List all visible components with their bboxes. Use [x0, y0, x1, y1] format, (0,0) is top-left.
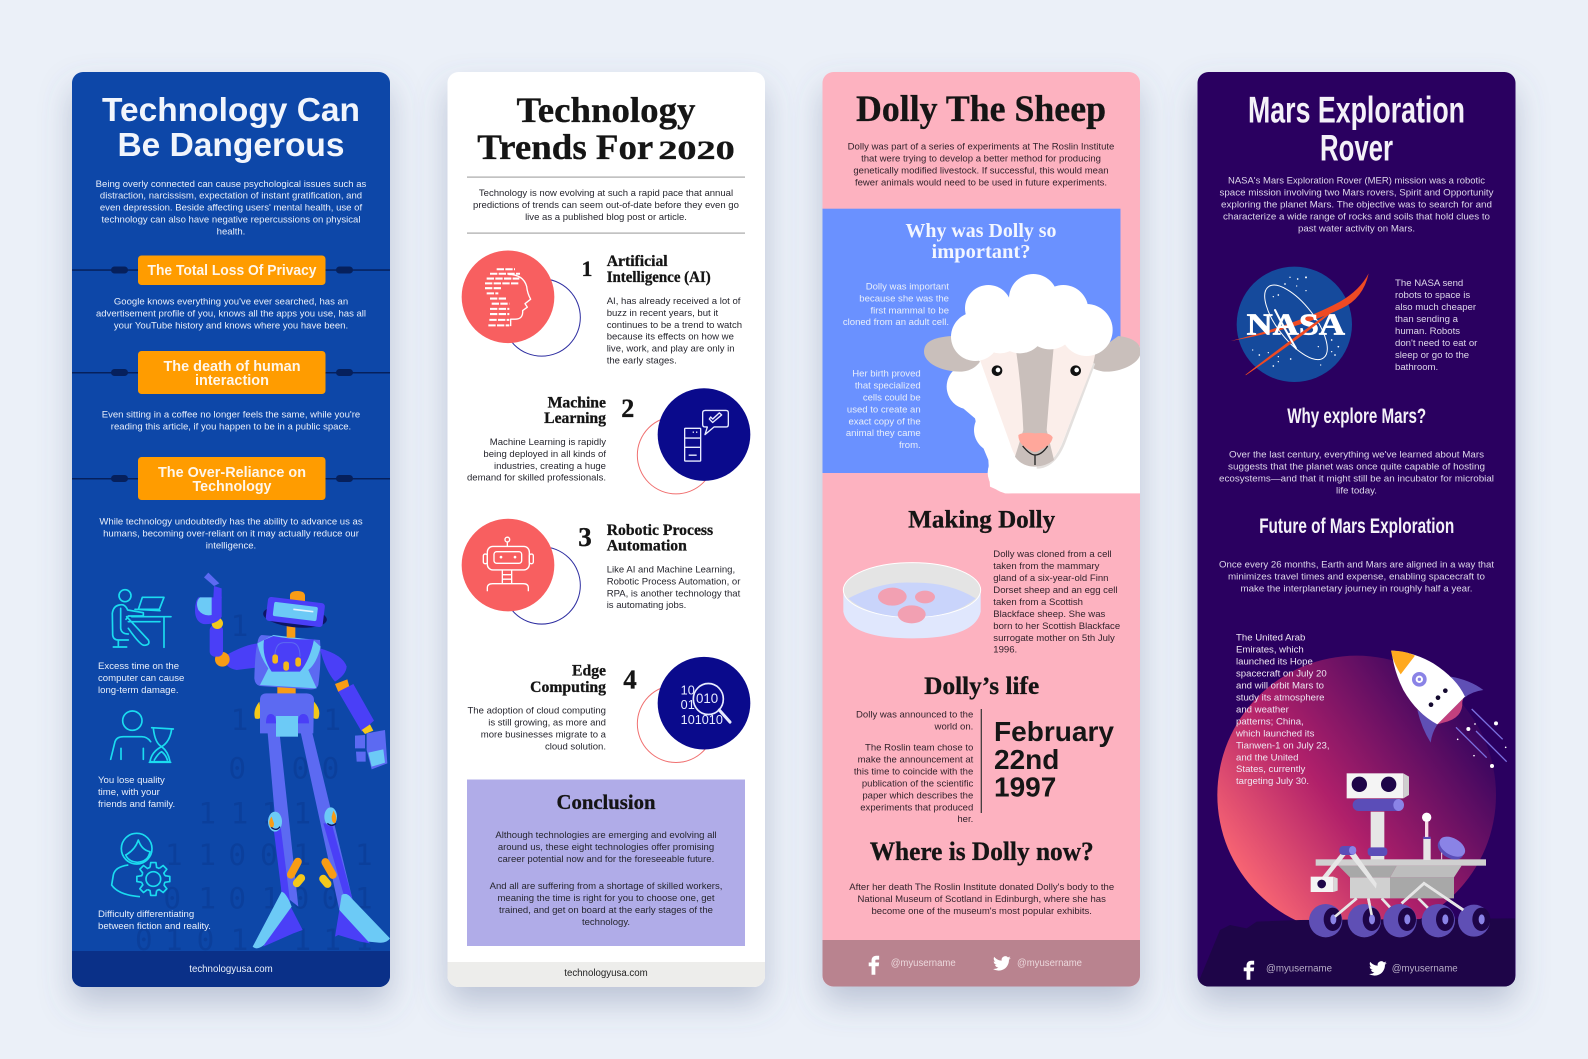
title [477, 90, 735, 167]
text: museum [849, 882, 1114, 917]
caption: fiction and reality [98, 909, 211, 932]
divider and date [981, 709, 1114, 813]
title: Trends For [477, 127, 653, 167]
icon: binary magnifier: 010 [696, 691, 718, 706]
heading: Intelligence (AI) [607, 269, 711, 286]
intro text: exploring the planet Mars. The objective was to search for and [1221, 199, 1492, 210]
text: nasa robots: also much cheaper [1395, 302, 1477, 313]
number 3: 3 [578, 522, 592, 552]
title: Mars Exploration [1248, 90, 1465, 131]
icon: AI head [462, 251, 580, 356]
text: cloned from a cell: Dorset sheep and an egg cell [993, 585, 1118, 596]
intro text: technology can also have negative repercussions on physical [102, 214, 360, 226]
conclusion text: technology. [582, 917, 630, 928]
caption: excess time: Excess time on the [98, 661, 179, 672]
text: announced: Dolly was announced to the [856, 709, 973, 720]
conclusion text: trained, and get on board at the early stages of the [499, 905, 713, 916]
binary background pattern: 0 [228, 881, 246, 915]
heading [906, 220, 1056, 263]
binary background pattern: 1 [231, 609, 248, 643]
text: why explore: ecosystems—and that it might still be an incubator for microbial [1219, 473, 1494, 484]
text: announced: world on. [934, 721, 973, 732]
text: specialized cells: that specialized [855, 380, 921, 391]
heading: Learning [544, 410, 606, 427]
title: Dolly The Sheep [856, 89, 1106, 130]
text: other missions: targeting July 30. [1236, 776, 1309, 787]
text: announced: her. [957, 814, 973, 825]
heading [607, 522, 713, 555]
panel: technology can be dangerous [72, 72, 390, 987]
text: human interaction [102, 410, 360, 432]
body text: demand for skilled professionals. [467, 473, 606, 484]
heading: Why was Dolly so [906, 220, 1056, 242]
text: why explore: suggests that the planet was once quite capable of hosting [1228, 461, 1485, 472]
text: other missions: Tianwen-1 on July 23, [1236, 740, 1330, 751]
orange banner: human interaction [138, 351, 326, 394]
binary background pattern: 1 [262, 796, 279, 830]
sheep illustration [924, 274, 1143, 493]
text: specialized cells: animal they came [846, 428, 921, 439]
robot illustration [195, 573, 390, 948]
orange banner: privacy [138, 256, 326, 285]
orange banner: over-reliance: Technology [192, 478, 272, 495]
text: other missions: The United Arab [1236, 633, 1305, 644]
text: over-reliance [99, 516, 363, 552]
text: other missions: and will orbit Mars to [1236, 681, 1324, 692]
binary background pattern: 0 [228, 751, 246, 785]
title: Technology [516, 90, 696, 130]
heading: Artificial [607, 253, 668, 270]
intro text: space mission involving two Mars rovers, Spirit and Opportunity [1220, 187, 1494, 198]
text: privacy: your YouTube history and knows where you have been. [114, 320, 348, 332]
text: other missions: spacecraft on July 20 [1236, 669, 1327, 680]
footer: technologyusa.com [72, 951, 390, 987]
divider and date: February [994, 716, 1114, 747]
icon: twitter [1369, 961, 1387, 976]
body text: AI, has already received a lot of [607, 296, 741, 307]
text: human interaction: Even sitting in a coffee no longer feels the same, while you're [102, 410, 360, 420]
heading: important? [932, 241, 1030, 263]
rules and intro text [467, 176, 745, 234]
caption: excess time: computer can cause [98, 673, 184, 684]
text: other missions: which launched its [1235, 728, 1315, 739]
intro text [96, 179, 367, 238]
text: other missions [1235, 633, 1330, 787]
handle: @myusername [1017, 958, 1082, 969]
text: future [1219, 559, 1494, 594]
text: announced: paper which describes the [862, 790, 973, 801]
number 4: 4 [623, 664, 637, 694]
binary background pattern: 1 [293, 838, 311, 872]
body text: Machine Learning is rapidly [490, 437, 606, 448]
text: cloned from a cell: Blackface sheep. She was [993, 609, 1106, 620]
icon: person and gear [112, 833, 170, 897]
icon: petri dish [843, 563, 981, 638]
orange banner: over-reliance: The Over-Reliance on [158, 464, 306, 481]
intro text: distraction, narcissism, expectation of instant gratification, and [100, 190, 362, 202]
title: 2020 [658, 136, 735, 165]
orange banner: over-reliance [138, 457, 326, 500]
footer: social [1244, 961, 1458, 980]
intro text: past water activity on Mars. [1298, 223, 1415, 234]
mars, ground and rover scene [1197, 651, 1515, 990]
text: specialized cells [846, 368, 921, 451]
binary background pattern [135, 609, 373, 957]
body text: buzz in recent years, but it [607, 308, 718, 319]
text: specialized cells: from. [899, 440, 921, 451]
icon: binary magnifier [637, 657, 750, 762]
footer: social [822, 940, 1140, 987]
heading: dolly's life: Dolly’s life [924, 673, 1039, 700]
panel: technology trends for 2020 [447, 72, 765, 987]
orange banner: privacy: The Total Loss Of Privacy [148, 262, 317, 279]
number 2: 2 [621, 394, 634, 423]
text: first mammal: first mammal to be [870, 305, 949, 316]
heading: Edge [572, 663, 606, 680]
title [1248, 90, 1465, 169]
heading: Robotic Process [607, 522, 713, 539]
rules and intro text: predictions of trends can seem out-of-date before they even go [473, 200, 739, 211]
orange banner: human interaction: The death of human [164, 358, 300, 375]
icon: binary magnifier: 01 [681, 697, 695, 712]
binary background pattern: 1 [198, 881, 216, 915]
heading [530, 663, 606, 696]
text: announced: this time to coincide with the [854, 766, 973, 777]
text: specialized cells: used to create an [847, 404, 921, 415]
intro text: health. [217, 226, 245, 238]
caption: quality time: You lose quality [98, 775, 165, 786]
planet mars [1217, 656, 1496, 934]
text: announced: publication of the scientific [862, 778, 974, 789]
footer: technologyusa.com: technologyusa.com [564, 968, 648, 979]
text: cloned from a cell: surrogate mother on 5th July [993, 633, 1115, 644]
heading [607, 253, 711, 286]
conclusion heading: Conclusion [556, 790, 656, 814]
binary background pattern: 0 [292, 881, 309, 915]
text: privacy: advertisement profile of you, knows all the apps you use, has all [96, 308, 366, 320]
wheels [1309, 904, 1490, 937]
heading: making dolly: Making Dolly [908, 507, 1056, 534]
text: why explore [1219, 449, 1494, 496]
text: announced [854, 709, 974, 825]
caption: quality time: friends and family. [98, 799, 175, 810]
icon: facebook [1244, 961, 1254, 980]
text: cloned from a cell: gland of a six-year-old Finn [993, 573, 1108, 584]
text: cloned from a cell: taken from a Scottish [993, 597, 1083, 608]
rocket [1391, 651, 1507, 768]
connector lines [72, 266, 390, 482]
icon: binary magnifier: 101010 [681, 712, 723, 727]
icon: person at computer [112, 590, 171, 647]
binary background pattern: 0 [163, 881, 181, 915]
heading: Automation [607, 538, 687, 555]
icon: nasa logo [1231, 267, 1369, 382]
binary background pattern: 0 [322, 881, 339, 915]
conclusion text: Although technologies are emerging and evolving all [495, 830, 717, 841]
item 3: robotic process automation [462, 519, 741, 624]
intro text: Dolly was part of a series of experiments at The Roslin Institute [848, 141, 1114, 152]
text: cloned from a cell: taken from the mammary [993, 561, 1100, 572]
heading: where is dolly now: Where is Dolly now? [870, 837, 1094, 866]
conclusion text: meaning the time is right for you to choose one, get [497, 893, 715, 904]
heading: Computing [530, 679, 606, 696]
text: nasa robots [1395, 278, 1478, 373]
conclusion text: And all are suffering from a shortage of skilled workers, [490, 881, 722, 892]
text: cloned from a cell [993, 549, 1120, 656]
caption: excess time: long-term damage. [98, 685, 179, 696]
icon: nasa logo: NASA [1247, 308, 1345, 342]
binary background pattern: 1 [323, 703, 341, 737]
body text: industries, creating a huge [494, 461, 606, 472]
divider and date: 22nd [994, 744, 1059, 775]
caption: excess time [98, 661, 184, 696]
intro text: Being overly connected can cause psychological issues such as [96, 179, 367, 190]
body text [607, 296, 742, 366]
caption: fiction and reality: Difficulty differentiating [98, 909, 194, 920]
binary background pattern: 0 [322, 751, 339, 785]
text: cloned from a cell: Dolly was cloned from a cell [993, 549, 1112, 560]
intro text: characterize a wide range of rocks and soils that hold clues to [1223, 211, 1490, 222]
caption: fiction and reality: between fiction and reality. [98, 921, 211, 932]
caption: quality time [98, 775, 175, 810]
heading: Machine [548, 394, 606, 411]
body text: cloud solution. [545, 741, 606, 752]
footer: technologyusa.com [447, 962, 765, 987]
body text: because its effects on how we [607, 332, 734, 342]
intro text: NASA's Mars Exploration Rover (MER) mission was a robotic [1228, 175, 1485, 186]
heading [544, 394, 606, 427]
body text: The adoption of cloud computing [467, 706, 606, 716]
panel: dolly the sheep [822, 72, 1143, 987]
text: other missions: study its atmosphere [1236, 693, 1325, 704]
text: announced: make the announcement at [858, 754, 974, 765]
text: why explore: Over the last century, everything we've learned about Mars [1229, 449, 1484, 460]
title: Technology Can [102, 91, 360, 128]
rules and intro text: live as a published blog post or article. [525, 212, 687, 223]
body text: being deployed in all kinds of [483, 449, 606, 460]
body text: Like AI and Machine Learning, [607, 564, 735, 575]
text: cloned from a cell: born to her Scottish Blackface [993, 621, 1120, 632]
intro text [1220, 175, 1494, 234]
text: nasa robots: than sending a [1395, 314, 1459, 325]
binary background pattern: 1 [262, 881, 279, 915]
text: over-reliance: intelligence. [206, 540, 256, 552]
binary background pattern: 1 [165, 838, 183, 872]
text: first mammal: because she was the [859, 293, 949, 304]
text: cloned from a cell: 1996. [993, 644, 1017, 656]
rules and intro text: Technology is now evolving at such a rapid pace that annual [479, 188, 733, 199]
text: human interaction: reading this article, if you happen to be in a public space. [111, 422, 351, 432]
icon: robot head [462, 519, 580, 624]
binary background pattern: 1 [355, 923, 373, 957]
text: other missions: Emirates, which [1236, 645, 1304, 656]
text: over-reliance: While technology undoubtedly has the ability to advance us as [99, 516, 363, 528]
item 1: artificial intelligence [462, 251, 742, 366]
handle: @myusername [891, 958, 956, 969]
text: nasa robots: bathroom. [1395, 362, 1438, 373]
text: over-reliance: humans, becoming over-reliant on it may actually reduce our [103, 528, 360, 540]
body text: RPA, is another technology that [607, 588, 741, 599]
body text: more businesses migrate to a [481, 730, 607, 741]
text: announced: The Roslin team chose to [865, 742, 973, 753]
binary background pattern: 1 [355, 881, 373, 915]
binary background pattern: 1 [231, 923, 248, 957]
binary background pattern: 1 [165, 923, 183, 957]
text: first mammal: cloned from an adult cell. [843, 317, 949, 328]
binary background pattern: 1 [293, 923, 311, 957]
binary background pattern: 0 [228, 838, 246, 872]
intro text [848, 141, 1114, 188]
text: nasa robots: sleep or go to the [1395, 350, 1469, 361]
item 2: machine learning [467, 388, 750, 494]
rover [1309, 773, 1490, 937]
binary background pattern: 1 [293, 796, 311, 830]
title: Be Dangerous [118, 126, 344, 163]
caption: quality time: time, with your [98, 787, 161, 798]
binary background pattern: 0 [135, 923, 153, 957]
intro text: even depression. Beside affecting users' mental health, use of [100, 202, 362, 214]
text: museum: become one of the museum's most popular exhibits. [871, 906, 1092, 917]
text: nasa robots: robots to space is [1395, 290, 1470, 301]
conclusion text: around us, these eight technologies offer promising [498, 842, 714, 853]
text: nasa robots: The NASA send [1395, 278, 1463, 289]
text: future: minimizes travel times and expense, enabling spacecraft to [1228, 571, 1485, 582]
title: Rover [1320, 128, 1393, 169]
binary background pattern: 0 [292, 751, 309, 785]
number 1: 1 [582, 256, 592, 281]
binary background pattern: 0 [197, 923, 214, 957]
text: museum: After her death The Roslin Institute donated Dolly's body to the [849, 882, 1114, 893]
body text: continues to be a trend to watch [607, 320, 742, 331]
handle: @myusername [1392, 964, 1458, 975]
text: specialized cells: exact copy of the [849, 416, 921, 427]
binary background pattern: 0 [260, 838, 278, 872]
binary background pattern: 1 [198, 838, 216, 872]
text: first mammal [843, 281, 949, 328]
body text: the early stages. [607, 355, 677, 366]
text: other missions: and the United [1236, 752, 1298, 763]
text: future: Once every 26 months, Earth and Mars are aligned in a way that [1219, 559, 1494, 570]
body text: is still growing, as more and [488, 718, 606, 728]
conclusion text [490, 830, 722, 928]
icon: facebook [869, 956, 879, 975]
binary background pattern: 1 [323, 923, 341, 957]
text: privacy: Google knows everything you've ever searched, has an [114, 296, 348, 308]
text: announced: experiments that produced [860, 802, 973, 813]
binary background pattern: 1 [231, 703, 248, 737]
body text [607, 564, 741, 611]
text: other missions: and weather [1236, 704, 1290, 715]
footer: technologyusa.com: technologyusa.com [189, 964, 273, 975]
text: other missions: launched its Hope [1236, 657, 1313, 668]
body text: is automating jobs. [607, 600, 686, 611]
text: nasa robots: don't need to eat or [1395, 338, 1478, 349]
icon: server and chat [637, 388, 750, 494]
divider and date: 1997 [994, 772, 1056, 803]
text: why explore: life today. [1336, 485, 1377, 496]
intro text: genetically modified livestock. If successful, this would mean [853, 165, 1109, 176]
text: nasa robots: human. Robots [1395, 326, 1460, 337]
icon: twitter [993, 956, 1011, 971]
text: museum: National Museum of Scotland in Edinburgh, where she has [858, 894, 1106, 905]
heading: why explore mars: Why explore Mars? [1287, 405, 1426, 428]
icon: person and hourglass [111, 711, 173, 762]
body text [467, 437, 606, 484]
text: first mammal: Dolly was important [866, 281, 949, 292]
binary background pattern: 1 [198, 796, 216, 830]
panel: mars exploration rover [1197, 72, 1516, 990]
icon: binary magnifier: 10 [681, 682, 695, 698]
binary background pattern: 1 [231, 796, 248, 830]
text: specialized cells: cells could be [863, 392, 921, 403]
blue panel: why important [822, 209, 1120, 473]
conclusion text: career potential now and for the foreseeable future. [498, 854, 714, 865]
text: privacy [96, 296, 366, 332]
ground [1197, 918, 1515, 990]
body text: Robotic Process Automation, or [607, 576, 741, 587]
conclusion box [467, 780, 745, 946]
text: other missions: patterns; China, [1236, 716, 1304, 727]
heading: future of mars exploration: Future of Mars Exploration [1259, 515, 1454, 538]
intro text: fewer animals would need to be used in future experiments. [855, 177, 1107, 188]
intro text: that were trying to develop a better method for producing [861, 153, 1101, 164]
handle: @myusername [1266, 964, 1332, 975]
body text [467, 706, 607, 752]
body text: live, work, and play are only in [607, 344, 735, 355]
orange banner: human interaction: interaction [195, 372, 269, 389]
item 4: edge computing [467, 657, 750, 762]
text: specialized cells: Her birth proved [852, 368, 921, 379]
binary background pattern: 1 [355, 838, 373, 872]
text: future: make the interplanetary journey in roughly half a year. [1240, 583, 1472, 594]
title [102, 91, 360, 163]
text: other missions: States, currently [1236, 764, 1306, 775]
